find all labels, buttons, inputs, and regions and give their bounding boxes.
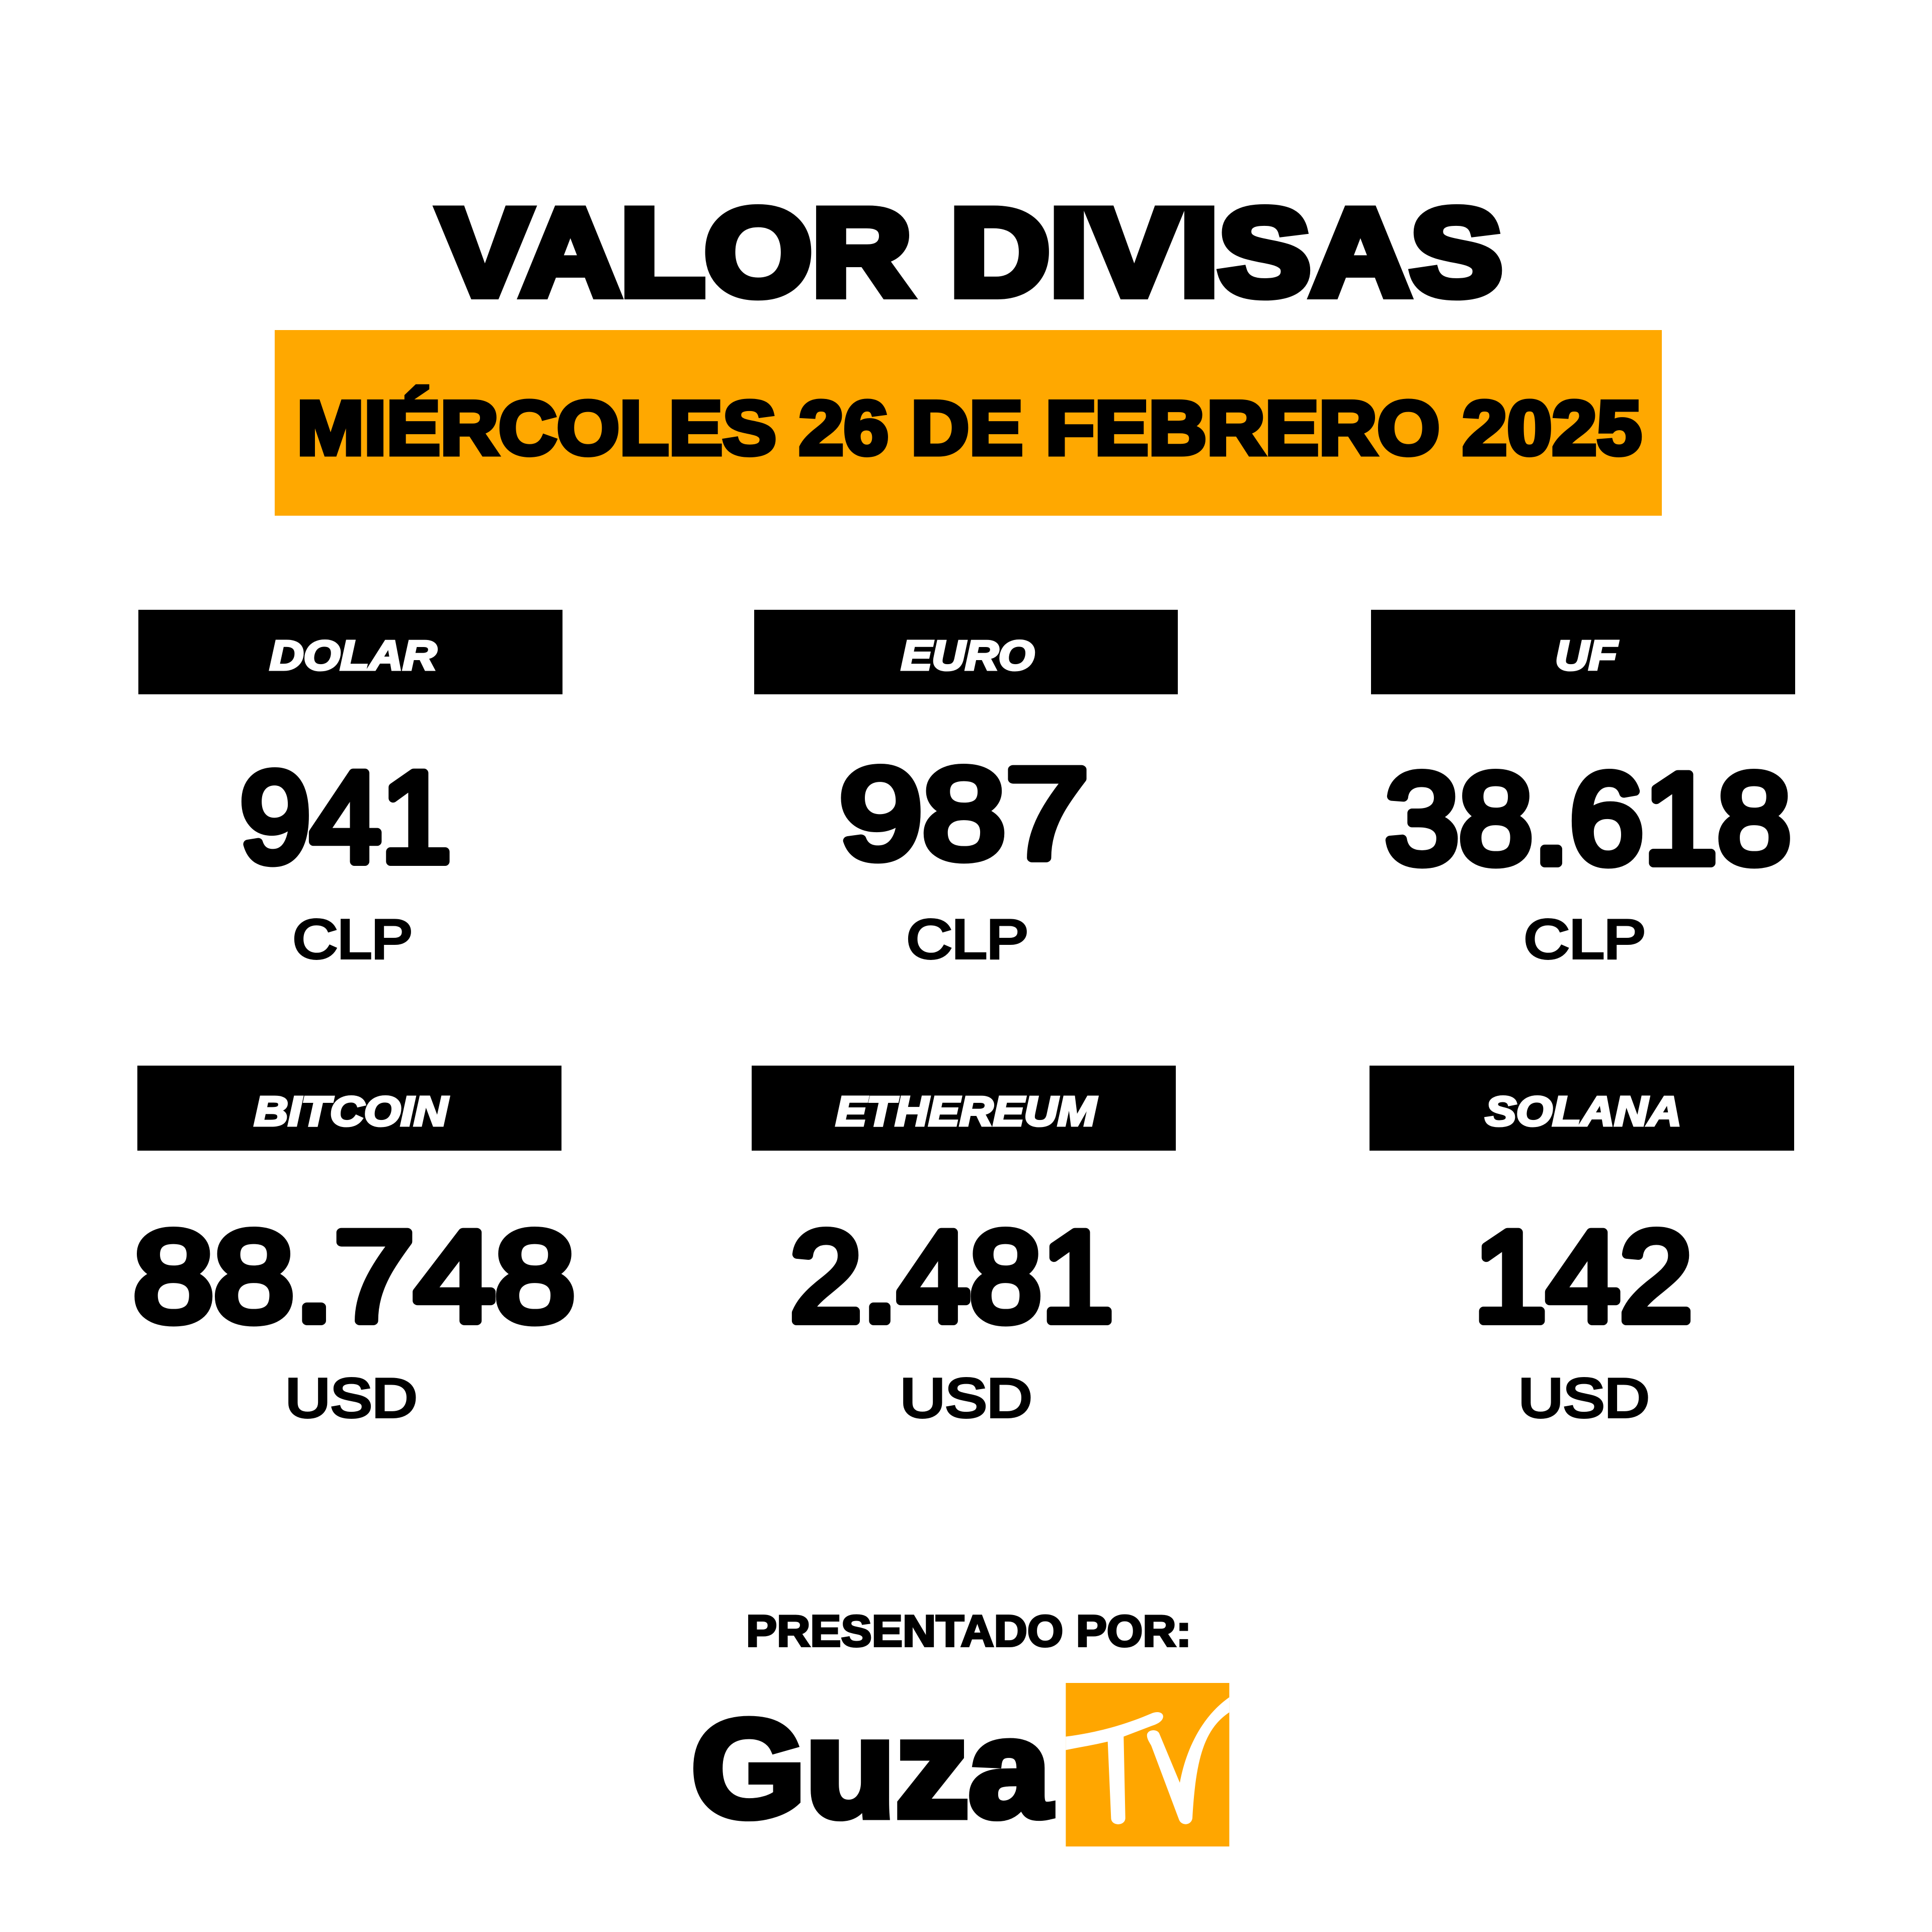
panel: bitcoin: [133, 1066, 575, 1429]
date banner: MIÉRCOLES 26 DE FEBRERO 2025: [297, 385, 1642, 471]
panel: dolar: CLP: [293, 909, 413, 970]
panel: euro: 987: [839, 742, 1089, 886]
panel: uf: 38.618: [1385, 747, 1791, 891]
panel: uf: CLP: [1524, 909, 1646, 970]
panel: euro: CLP: [907, 909, 1028, 970]
panel: ethereum: [752, 1066, 1176, 1429]
panel: dolar: [138, 610, 562, 970]
panel: uf: [1371, 610, 1795, 970]
panel: solana: SOLANA: [1485, 1088, 1681, 1135]
panel: bitcoin: BITCOIN: [254, 1088, 449, 1135]
panel: ethereum: ETHEREUM: [836, 1088, 1097, 1135]
panel: dolar: 941: [240, 746, 451, 889]
panel: uf: UF: [1555, 632, 1619, 679]
logo: Guza TV: [691, 1683, 1229, 1846]
panel: bitcoin: USD: [285, 1367, 417, 1429]
panel: solana: 142: [1474, 1205, 1693, 1348]
logo: Guza TV: Guza: [691, 1692, 1052, 1846]
panel: bitcoin: 88.748: [133, 1205, 575, 1348]
panel: ethereum: 2.481: [790, 1205, 1113, 1348]
panel: solana: USD: [1518, 1367, 1649, 1429]
title: VALOR DIVISAS: [439, 183, 1502, 321]
panel: euro: [754, 610, 1178, 970]
panel: solana: [1370, 1066, 1794, 1429]
panel: euro: EURO: [901, 632, 1034, 679]
date banner: [275, 330, 1662, 516]
panel: dolar: DOLAR: [270, 632, 437, 679]
panel: ethereum: USD: [900, 1367, 1032, 1429]
sponsor heading: PRESENTADO POR:: [746, 1606, 1191, 1656]
